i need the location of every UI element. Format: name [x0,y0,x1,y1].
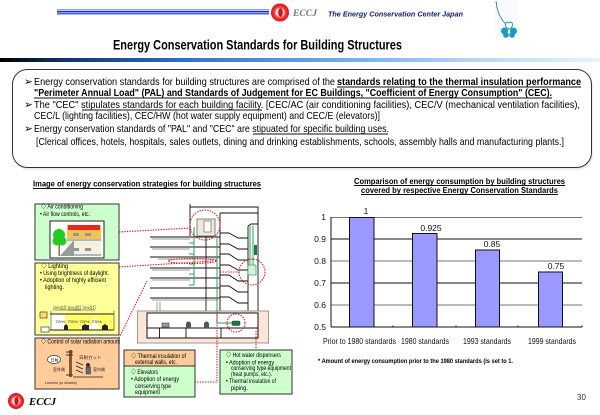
bullet 3 [24,123,564,148]
air-conditioned room illustration [50,221,104,258]
bullet 1 [24,76,581,99]
icon: clover [495,0,518,38]
panel: solar radiation control [35,338,120,389]
louver illustration [45,350,105,385]
plant room units [162,323,169,327]
panel: hot water dispensers: piping. [231,386,248,392]
bar chart: 1999 standards [528,336,576,346]
louver illustration: 日射 [50,356,58,362]
building cross-section [138,204,268,343]
bullet 1: ➢ [24,76,33,88]
heading: comparison chart: covered by respective Energy Conservation Standards [361,186,559,195]
panel: elevators [124,366,195,397]
bullet 2: ➢ [24,99,33,111]
organisation name: The Energy Conservation Center Japan [328,10,463,18]
panel: hot water dispensers: (heat pumps, etc.). [231,372,272,378]
panel: hot water dispensers: ◇ Hot water dispensers [226,352,281,359]
basement [138,311,268,343]
panel: thermal insulation: external walls, etc. [135,360,177,366]
panel: elevators: conserving type [135,384,172,390]
panel: air conditioning: • Air flow controls, etc. [40,212,90,218]
daylighting illustration: 75% 75% 75% 75% [55,319,103,324]
panel: lighting: • Using brightness of daylight. [40,271,109,277]
heading: comparison chart [354,177,566,195]
louver illustration: 日射カット [79,354,102,361]
panel: elevators: ◇ Elevators [131,369,158,376]
roof and frame [190,204,258,313]
panel: elevators: • Adoption of energy [131,377,179,383]
chart footnote: * Amount of energy consumption prior to the 1980 standards (is set to 1. [318,359,513,365]
y-axis labels: 1 [321,212,326,222]
bar chart [314,206,582,346]
bar chart: 1993 standards [463,336,511,346]
stepped facade [220,233,248,303]
bar chart: 0.5 [314,322,326,332]
bar chart: 0.75 [548,261,565,271]
ECCJ wordmark bottom: ECCJ [28,397,57,408]
bar chart: 0.9 [314,234,326,244]
bullet 1: Energy conservation standards for building structures are comprised of the [34,76,335,88]
panel: air conditioning [35,204,119,260]
bars [350,218,374,327]
header gradient rule [0,58,600,62]
ECCJ wordmark: ECCJ [292,8,318,18]
louver illustration: Louvers (or shades) [45,381,77,385]
air-conditioning unit [197,219,215,236]
page number: 30 [577,393,586,402]
green service pipes [189,226,253,323]
louver illustration: 室外側 [53,366,65,372]
daylighting illustration [40,304,114,332]
panel: lighting [35,263,119,335]
panel: air conditioning: ◇ Air conditioning [41,204,83,210]
daylighting illustration: 25%点灯 50%点灯 75%点灯 [53,304,96,310]
red dotted connectors [119,228,256,382]
panel: hot water dispensers: conserving type equipment [231,366,291,372]
service core [248,224,258,312]
heading: comparison chart: Comparison of energy consumption by building structures [354,177,566,186]
bullet 2: CEC/L (lighting facilities), CEC/HW (hot water supply equipment) and CEC/E (elevators)] [34,110,380,122]
panel: lighting: • Adoption of highly efficient [40,278,106,284]
title: Energy Conservation Standards for Building Structures [113,36,402,52]
bar chart: 0.7 [314,278,326,288]
bar chart: 0.6 [314,300,326,310]
header stripes [57,9,269,14]
panel: summary of standards [12,70,593,170]
heading: strategies image: Image of energy conservation strategies for building structures [33,180,262,188]
panel: hot water dispensers: • Thermal insulation of [226,379,276,385]
icon: ECCJ logo top [271,4,289,22]
bar chart: 0.8 [314,256,326,266]
value labels: 1 [364,206,369,216]
panel: solar radiation control: ◇ Control of solar radiation amount [41,338,120,346]
bullet 2 [24,99,580,122]
bar chart: 1980 standards [401,336,449,346]
panel: lighting: lighting. [45,285,64,291]
bullet 3: Energy conservation standards of "PAL" and "CEC" are stipuated for specific building uses. [34,123,389,135]
panel: thermal insulation: ◇ Thermal insulation of [131,353,186,360]
bar chart: 0.925 [420,223,442,233]
bullet 3: ➢ [24,123,33,135]
louver illustration: 室内側 [93,366,105,372]
panel: hot water dispensers: • Adoption of energy [226,360,274,366]
bar chart: 0.85 [484,239,501,249]
panel: lighting: ◇ Lighting [41,263,68,270]
x-axis labels: Prior to 1980 standards [323,336,396,346]
red highlight circles [190,210,220,240]
panel: hot water dispensers [220,350,292,394]
floor slabs [150,237,220,298]
gridlines and axes [331,218,582,305]
panel: thermal insulation [124,350,195,366]
panel: elevators: equipment [135,390,160,396]
icon: ECCJ logo bottom [8,393,24,409]
